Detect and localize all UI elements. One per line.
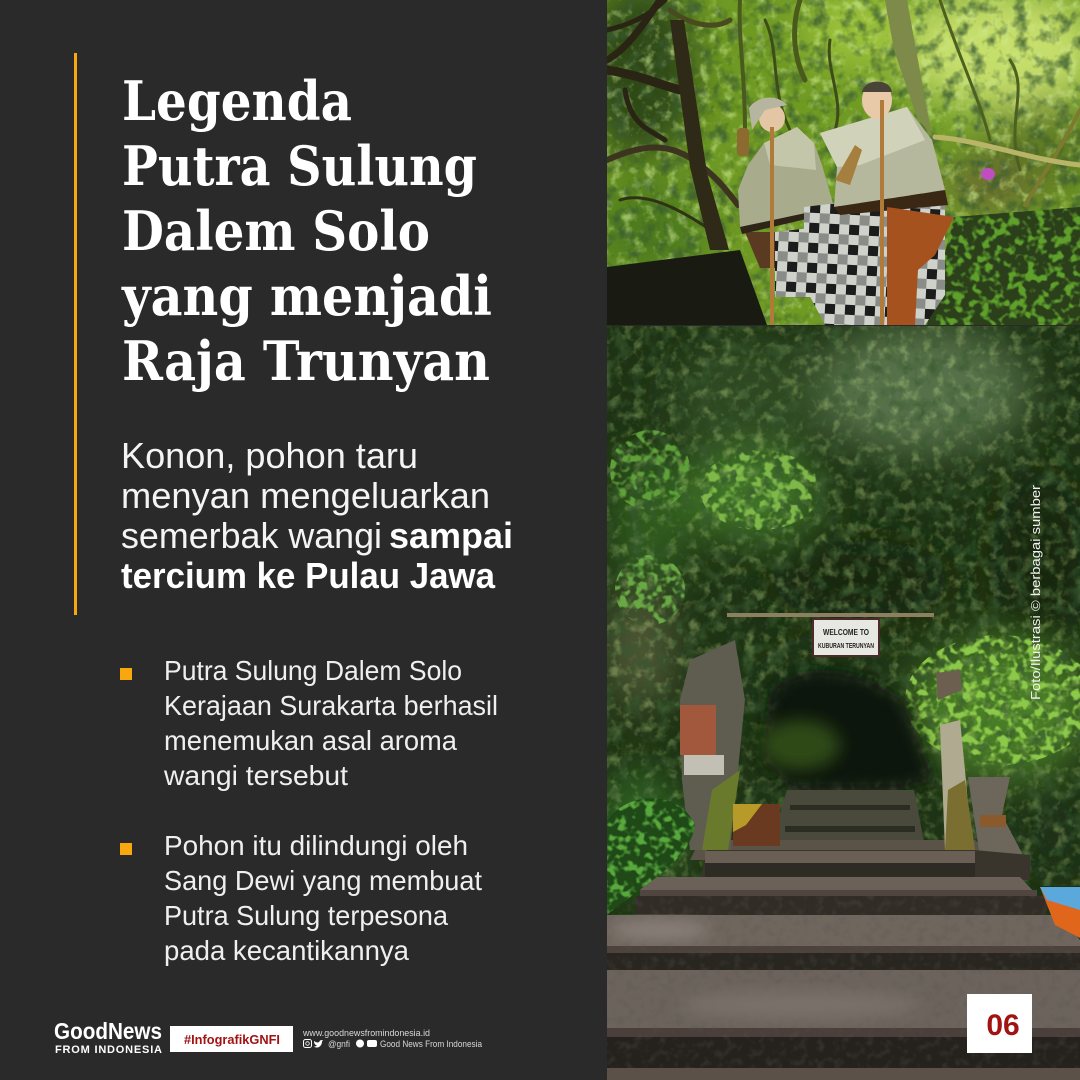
figure left bbox=[737, 98, 837, 297]
social links: www.goodnewsfromindonesia.id bbox=[302, 1028, 430, 1039]
title: Raja Trunyan bbox=[122, 329, 490, 393]
sign: welcome: KUBURAN TERUNYAN bbox=[818, 641, 874, 650]
offerings bbox=[981, 168, 995, 180]
divider between photos bbox=[607, 325, 1080, 326]
hashtag badge bbox=[170, 1026, 293, 1052]
bullet item two: Sang Dewi yang membuat bbox=[164, 865, 482, 896]
subtitle: sampai bbox=[389, 515, 513, 556]
mossy wall right bbox=[927, 207, 1080, 325]
subtitle: tercium ke Pulau Jawa bbox=[121, 555, 496, 596]
bright leaf clusters bbox=[610, 430, 1080, 765]
bush left of stairs bbox=[607, 798, 695, 915]
page number: 06 bbox=[986, 1009, 1020, 1042]
ground bbox=[690, 840, 1000, 860]
subtitle bbox=[121, 435, 513, 596]
logo bbox=[54, 1018, 162, 1056]
subtitle: menyan mengeluarkan bbox=[121, 475, 490, 516]
title: yang menjadi bbox=[121, 264, 492, 328]
bullet item one: wangi tersebut bbox=[163, 760, 348, 791]
stone wall left bbox=[607, 250, 767, 325]
left gate pillar bbox=[680, 640, 745, 850]
sign: welcome bbox=[812, 618, 880, 657]
tree trunks bbox=[670, 20, 729, 250]
figure right bbox=[804, 81, 954, 325]
bullet item one bbox=[120, 655, 498, 791]
footer bbox=[54, 1018, 483, 1056]
bullet item two: Pohon itu dilindungi oleh bbox=[164, 830, 468, 861]
subtitle: Konon, pohon taru bbox=[121, 435, 418, 476]
branches bbox=[607, 0, 1080, 240]
crossbar bbox=[727, 613, 934, 617]
bullet item one: menemukan asal aroma bbox=[164, 725, 457, 756]
barrel bbox=[733, 804, 780, 846]
bullet item two: Putra Sulung terpesona bbox=[164, 900, 448, 931]
photo credit: Foto/Ilustrasi © berbagai sumber bbox=[1028, 484, 1043, 700]
subtitle: semerbak wangi bbox=[121, 515, 382, 556]
accent bar bbox=[74, 53, 77, 615]
photo: Trunyan guardian statues in the forest bbox=[580, 0, 1080, 325]
bullet item one: Putra Sulung Dalem Solo bbox=[164, 655, 462, 686]
title bbox=[121, 69, 492, 393]
bullet item two bbox=[120, 830, 482, 966]
social links bbox=[302, 1028, 483, 1050]
social links: Good News From Indonesia bbox=[380, 1039, 483, 1050]
sign: welcome: WELCOME TO bbox=[823, 628, 869, 637]
right gate pillar bbox=[936, 670, 1024, 857]
hashtag badge: #InfografikGNFI bbox=[184, 1032, 280, 1047]
logo: FROM INDONESIA bbox=[55, 1044, 162, 1056]
walking sticks bbox=[772, 100, 882, 325]
photo: Kuburan Trunyan gate and stairs bbox=[600, 325, 1080, 1080]
dark tunnel bbox=[760, 670, 935, 790]
page number bbox=[967, 994, 1032, 1053]
bullet item one: Kerajaan Surakarta berhasil bbox=[164, 690, 498, 721]
panel: dark background bbox=[0, 0, 607, 1080]
logo: GoodNews bbox=[54, 1018, 162, 1044]
upper steps bbox=[780, 790, 924, 840]
title: Dalem Solo bbox=[122, 199, 430, 263]
stairs bbox=[607, 850, 1080, 1080]
bullet item two: pada kecantikannya bbox=[164, 935, 409, 966]
title: Legenda bbox=[122, 69, 352, 133]
boat bbox=[1040, 887, 1080, 938]
title: Putra Sulung bbox=[122, 134, 477, 198]
social links: @gnfi bbox=[328, 1039, 350, 1050]
